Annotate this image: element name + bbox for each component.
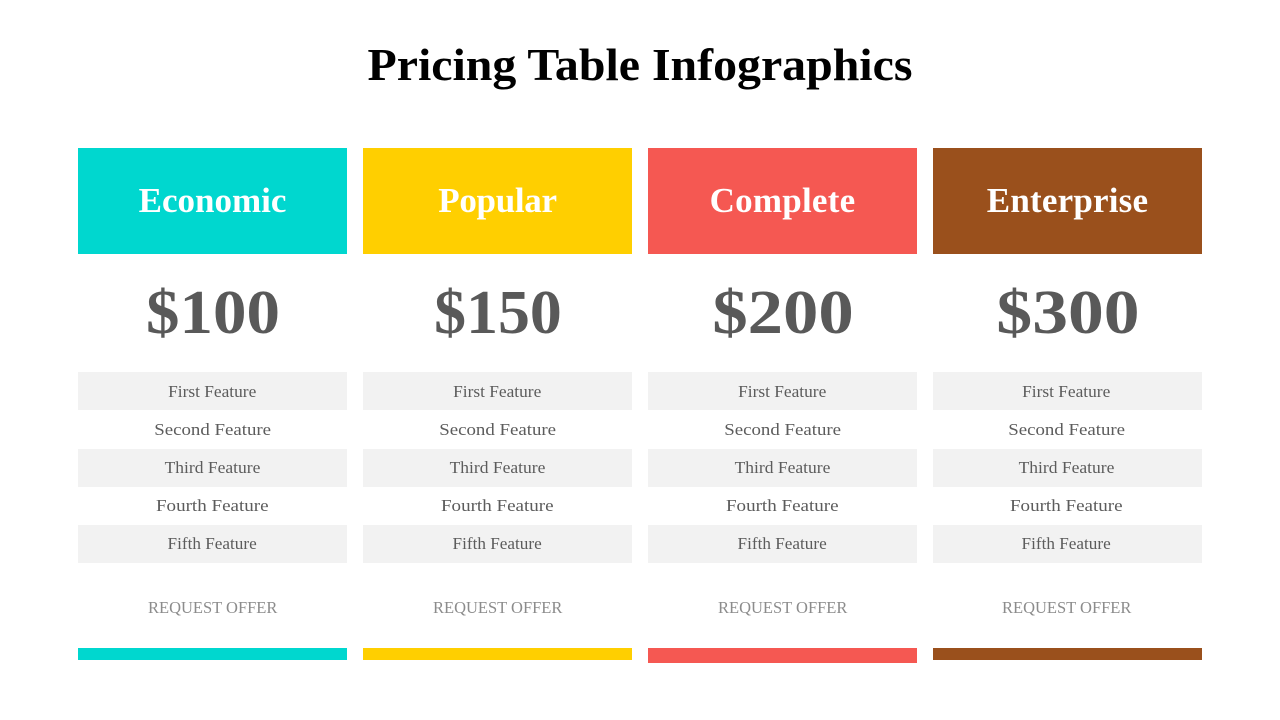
feature 1 xyxy=(648,372,917,410)
feature 5: Fifth Feature xyxy=(738,534,827,553)
heading: Popular xyxy=(363,148,632,254)
price: $100: $100 xyxy=(146,279,279,347)
call to action: REQUEST OFFER xyxy=(1002,598,1131,617)
feature 2: Second Feature xyxy=(1008,420,1125,439)
feature 3: Third Feature xyxy=(1019,458,1114,477)
feature 5 xyxy=(78,525,347,563)
feature 5: Fifth Feature xyxy=(453,534,542,553)
feature 5 xyxy=(363,525,632,563)
heading: Enterprise: Enterprise xyxy=(987,181,1148,220)
price: $150: $150 xyxy=(434,279,561,347)
feature 2: Second Feature xyxy=(439,420,556,439)
call to action: REQUEST OFFER xyxy=(148,598,277,617)
feature list: Popular xyxy=(363,372,632,563)
heading: Popular: Popular xyxy=(438,181,557,220)
heading: Economic xyxy=(78,148,347,254)
feature 2: Second Feature xyxy=(724,420,841,439)
panel: Enterprise xyxy=(933,148,1202,660)
price: $300: $300 xyxy=(996,279,1139,347)
footer bar xyxy=(363,648,632,660)
footer bar xyxy=(648,648,917,663)
feature 3: Third Feature xyxy=(165,458,260,477)
feature list: Economic xyxy=(78,372,347,563)
feature list: Complete xyxy=(648,372,917,563)
heading: Complete xyxy=(648,148,917,254)
feature 1 xyxy=(363,372,632,410)
feature 1 xyxy=(78,372,347,410)
call to action: REQUEST OFFER xyxy=(433,598,562,617)
feature 4: Fourth Feature xyxy=(1010,496,1123,515)
feature list: Enterprise xyxy=(933,372,1202,563)
feature 5: Fifth Feature xyxy=(168,534,257,553)
feature 5 xyxy=(648,525,917,563)
feature 3 xyxy=(363,449,632,487)
footer bar xyxy=(933,648,1202,660)
feature 3 xyxy=(78,449,347,487)
heading: Economic: Economic xyxy=(139,181,286,220)
panel: Economic xyxy=(78,148,347,660)
feature 2: Second Feature xyxy=(154,420,271,439)
feature 5 xyxy=(933,525,1202,563)
feature 3: Third Feature xyxy=(450,458,545,477)
feature 3: Third Feature xyxy=(735,458,830,477)
panel: Complete xyxy=(648,148,917,663)
feature 3 xyxy=(648,449,917,487)
feature 5: Fifth Feature xyxy=(1022,534,1111,553)
feature 4: Fourth Feature xyxy=(156,496,269,515)
feature 1: First Feature xyxy=(738,382,827,401)
feature 1: First Feature xyxy=(453,382,542,401)
feature 1: First Feature xyxy=(1022,382,1111,401)
feature 4: Fourth Feature xyxy=(726,496,839,515)
heading: Enterprise xyxy=(933,148,1202,254)
footer bar xyxy=(78,648,347,660)
feature 4: Fourth Feature xyxy=(441,496,554,515)
feature 1: First Feature xyxy=(168,382,257,401)
feature 3 xyxy=(933,449,1202,487)
call to action: REQUEST OFFER xyxy=(718,598,847,617)
feature 1 xyxy=(933,372,1202,410)
title: Pricing Table Infographics xyxy=(368,39,912,90)
panel: Popular xyxy=(363,148,632,660)
price: $200: $200 xyxy=(712,279,853,347)
heading: Complete: Complete xyxy=(710,181,855,220)
